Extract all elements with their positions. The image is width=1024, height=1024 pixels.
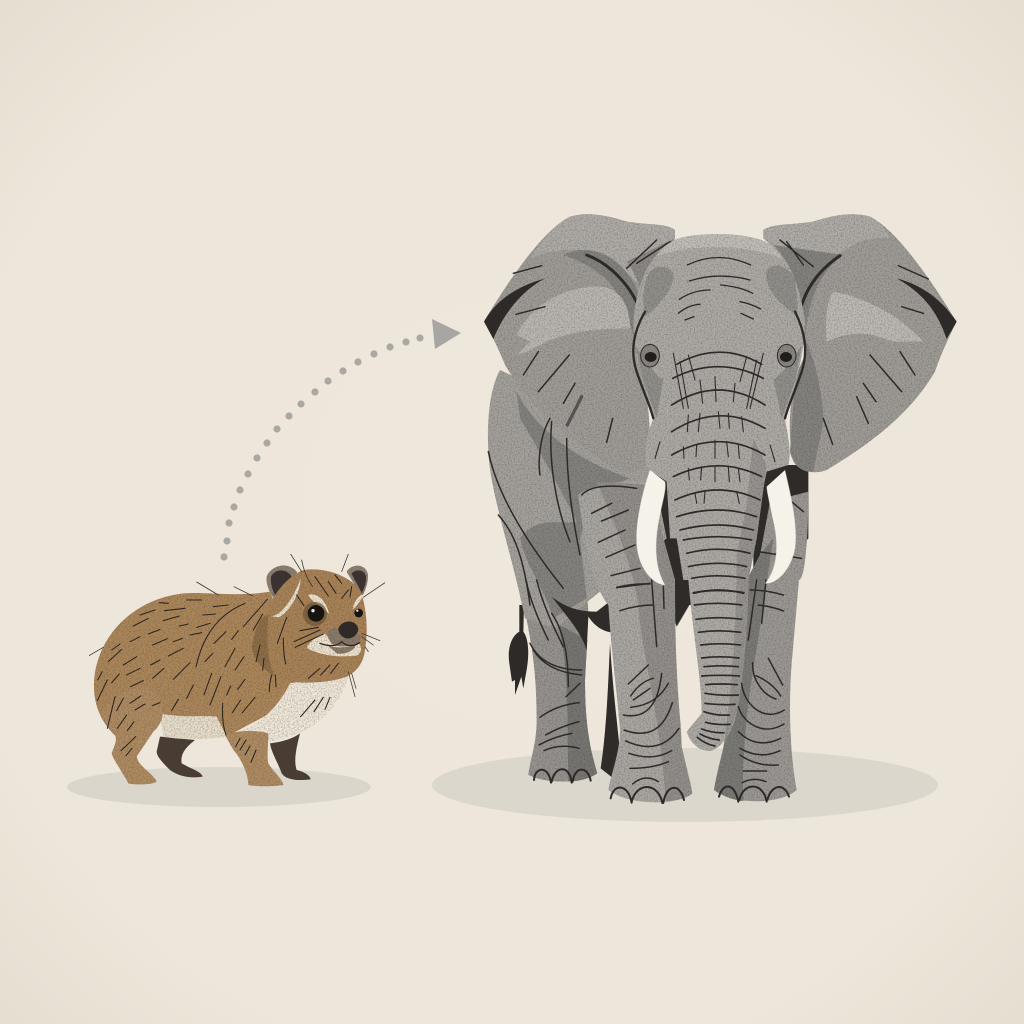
elephant left ear (484, 214, 675, 472)
elephant right ear (763, 214, 957, 472)
elephant (484, 214, 957, 804)
elephant front left leg (578, 482, 692, 802)
elephant belly shadow (552, 597, 612, 650)
elephant trunk wrinkles (672, 352, 765, 593)
elephant front right leg (714, 492, 808, 801)
hyrax body (94, 592, 303, 740)
elephant body (488, 370, 667, 628)
elephant head (633, 234, 805, 538)
elephant tusks (636, 470, 796, 585)
elephant rear leg (518, 580, 597, 782)
hyrax rear leg (100, 687, 163, 784)
elephant head contour lines (633, 312, 805, 418)
hyrax chest (233, 677, 348, 742)
hyrax ground shadow (67, 767, 371, 807)
dotted arrow from hyrax to elephant (220, 319, 461, 561)
hyrax fur strokes (97, 575, 352, 762)
elephant leg wrinkles and toes (526, 580, 789, 804)
hyrax nose and mouth (320, 621, 359, 646)
elephant left tusk (636, 470, 665, 585)
elephant temples (635, 265, 802, 418)
elephant eyes (641, 344, 796, 367)
hyrax ears (266, 565, 368, 607)
elephant right tusk (765, 470, 796, 583)
elephant tail (509, 605, 528, 695)
elephant far leg and shadow behind trunk (601, 465, 808, 778)
elephant ground shadow (432, 748, 938, 822)
elephant body wrinkles (488, 418, 803, 605)
elephant forehead wrinkles (678, 257, 761, 320)
elephant trunk (670, 438, 767, 751)
hyrax head (266, 569, 367, 683)
hyrax face markings (270, 578, 363, 656)
hyrax front leg (225, 731, 283, 786)
hyrax muzzle (327, 628, 360, 654)
hyrax whiskers (89, 554, 385, 697)
hyrax far legs (157, 733, 311, 780)
hyrax eyes (303, 602, 363, 626)
hyrax (89, 554, 385, 786)
hyrax belly (160, 713, 228, 739)
